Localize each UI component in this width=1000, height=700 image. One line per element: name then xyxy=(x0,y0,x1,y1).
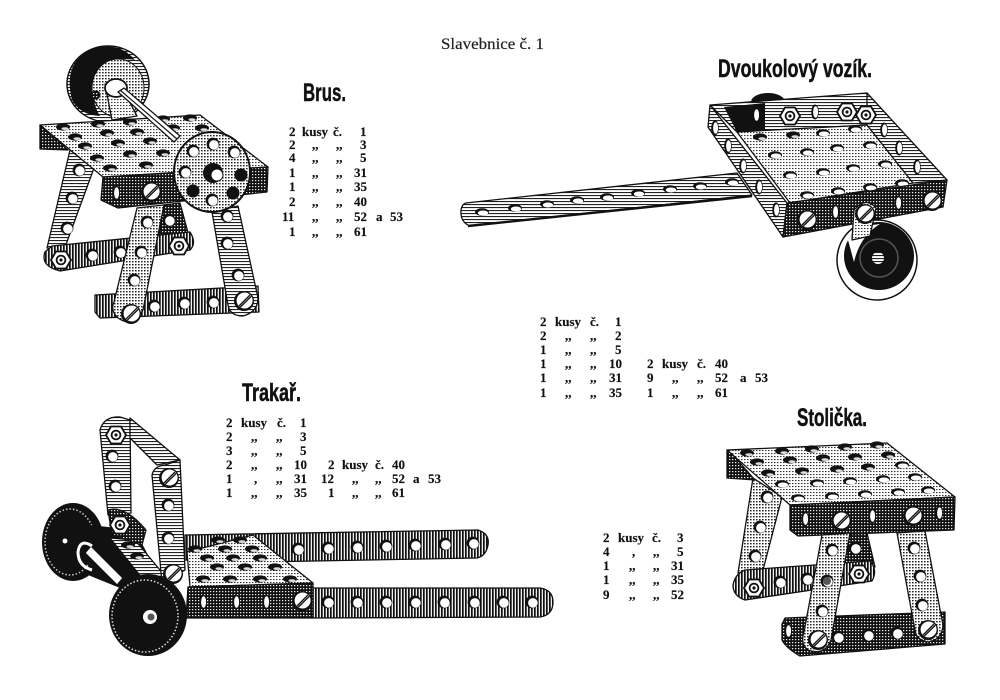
parts list: Trakař: ,, xyxy=(251,485,258,500)
axle bracket xyxy=(105,84,137,120)
bottom bar xyxy=(95,286,259,318)
parts list: Brus xyxy=(282,124,404,239)
parts list: Trakař: ,, xyxy=(276,429,282,444)
parts list: Trakař: , xyxy=(254,471,257,486)
parts list: Brus: ,, xyxy=(336,150,342,165)
parts list: Dvoukolový vozík: a xyxy=(740,370,747,385)
rear left leg xyxy=(738,478,782,573)
rear left leg xyxy=(47,150,94,250)
drawbar xyxy=(461,173,752,226)
parts list: Trakař: ,, xyxy=(352,485,358,500)
right upright xyxy=(152,460,185,583)
parts list: Stolička: ,, xyxy=(629,572,636,587)
back wall xyxy=(710,93,870,132)
front wheel xyxy=(109,574,187,656)
parts list: Brus: kusy xyxy=(302,124,329,139)
parts list: Trakař: č. xyxy=(375,457,384,472)
parts list: Dvoukolový vozík: č. xyxy=(697,356,706,371)
left wall xyxy=(708,105,787,237)
parts list: Trakař: 2 xyxy=(226,457,232,472)
parts list: Brus: 31 xyxy=(354,165,367,180)
parts list: Dvoukolový vozík xyxy=(540,314,768,400)
parts list: Dvoukolový vozík: 1 xyxy=(540,385,546,400)
parts list: Dvoukolový vozík: 10 xyxy=(609,356,622,371)
parts list: Stolička: ,, xyxy=(629,587,636,602)
parts list: Brus: 4 xyxy=(289,150,296,165)
parts list: Brus: 52 xyxy=(354,209,367,224)
parts list: Trakař: ,, xyxy=(251,443,258,458)
parts list: Stolička: 9 xyxy=(603,587,610,602)
parts list: Dvoukolový vozík: ,, xyxy=(590,385,596,400)
parts list: Trakař: ,, xyxy=(251,429,258,444)
heading: Dvoukolový vozík: Dvoukolový vozík. xyxy=(718,55,872,83)
page title: Slavebnice č. 1 xyxy=(441,36,544,53)
rear wheel edge xyxy=(751,93,785,111)
parts list: Brus: 1 xyxy=(289,165,296,180)
parts list: Dvoukolový vozík: ,, xyxy=(590,370,596,385)
dark shadow behind axle xyxy=(88,525,160,590)
parts list: Trakař: 2 xyxy=(328,457,334,472)
parts list: Stolička: ,, xyxy=(653,544,660,559)
parts list: Stolička: ,, xyxy=(653,558,660,573)
illustration: Dvoukolový vozík cart xyxy=(461,93,947,300)
parts list: Stolička: č. xyxy=(652,530,661,545)
parts list: Stolička: 35 xyxy=(671,572,684,587)
parts list: Brus: 2 xyxy=(289,124,296,139)
parts list: Dvoukolový vozík: 61 xyxy=(715,385,728,400)
parts list: Stolička: ,, xyxy=(653,572,660,587)
deck plate xyxy=(187,535,313,587)
parts list: Brus: 11 xyxy=(282,209,294,224)
parts list: Stolička: 1 xyxy=(603,572,610,587)
parts list: Stolička: , xyxy=(632,544,635,559)
parts list: Brus: ,, xyxy=(336,209,342,224)
front right leg xyxy=(897,531,943,642)
parts list: Trakař: 53 xyxy=(428,471,442,486)
parts list: Dvoukolový vozík: ,, xyxy=(565,342,572,357)
parts list: Dvoukolový vozík: 5 xyxy=(615,342,622,357)
parts list: Dvoukolový vozík: 52 xyxy=(715,370,728,385)
parts list: Brus: 61 xyxy=(354,224,367,239)
parts list: Brus: 3 xyxy=(360,137,367,152)
parts list: Trakař: ,, xyxy=(276,485,282,500)
parts list: Trakař: č. xyxy=(277,415,286,430)
illustration: Brus grinder xyxy=(40,46,268,324)
heading: Trakař: Trakař. xyxy=(242,379,301,407)
table top plate xyxy=(40,115,268,177)
parts list: Trakař: 3 xyxy=(226,443,233,458)
parts list: Dvoukolový vozík: ,, xyxy=(590,356,596,371)
parts list: Dvoukolový vozík: 2 xyxy=(647,356,654,371)
parts list: Stolička: 52 xyxy=(671,587,684,602)
parts list: Trakař: 2 xyxy=(226,415,232,430)
parts list: Trakař: 40 xyxy=(392,457,405,472)
parts list: Dvoukolový vozík: ,, xyxy=(565,385,572,400)
parts list: Dvoukolový vozík: ,, xyxy=(565,356,572,371)
axle xyxy=(118,88,180,142)
parts list: Brus: 40 xyxy=(354,194,367,209)
parts list: Trakař xyxy=(226,415,442,500)
parts list: Trakař: 1 xyxy=(300,415,306,430)
seat top plate xyxy=(727,443,955,505)
bottom bar xyxy=(782,612,945,656)
front wall xyxy=(783,180,947,237)
parts list: Brus: ,, xyxy=(312,194,318,209)
front seat side xyxy=(790,497,955,536)
left flange xyxy=(727,450,755,480)
top diagonal bar xyxy=(130,418,180,465)
parts list: Dvoukolový vozík: ,, xyxy=(565,328,572,343)
parts list: Trakař: kusy xyxy=(342,457,369,472)
parts list: Trakař: 1 xyxy=(226,485,232,500)
parts list: Brus: 2 xyxy=(289,137,296,152)
parts list: Brus: 1 xyxy=(289,224,296,239)
lower handle xyxy=(313,588,553,618)
parts list: Trakař: 2 xyxy=(226,429,232,444)
parts list: Dvoukolový vozík: 2 xyxy=(540,314,546,329)
parts list: Brus: ,, xyxy=(336,194,342,209)
parts list: Stolička: 3 xyxy=(677,530,684,545)
parts list: Brus: 5 xyxy=(360,150,367,165)
parts list: Brus: č. xyxy=(333,124,342,139)
parts list: Trakař: a xyxy=(413,471,420,486)
parts list: Dvoukolový vozík: ,, xyxy=(590,328,596,343)
parts list: Dvoukolový vozík: 35 xyxy=(609,385,622,400)
floor plate xyxy=(737,125,913,203)
parts list: Trakař: ,, xyxy=(251,457,258,472)
parts list: Brus: 53 xyxy=(390,209,404,224)
parts list: Brus: ,, xyxy=(312,209,318,224)
parts list: Dvoukolový vozík: ,, xyxy=(565,370,572,385)
parts list: Trakař: kusy xyxy=(241,415,268,430)
parts list: Brus: 1 xyxy=(289,179,296,194)
front left leg xyxy=(113,205,164,322)
parts list: Dvoukolový vozík: ,, xyxy=(697,370,704,385)
rear horizontal bar xyxy=(733,561,875,600)
parts list: Dvoukolový vozík: 1 xyxy=(540,356,546,371)
parts list: Dvoukolový vozík: 40 xyxy=(715,356,728,371)
parts list: Dvoukolový vozík: 1 xyxy=(540,342,546,357)
parts list: Dvoukolový vozík: 9 xyxy=(647,370,654,385)
parts list: Stolička: ,, xyxy=(653,587,660,602)
parts list: Stolička: 2 xyxy=(603,530,610,545)
axle bracket and screw xyxy=(852,202,876,240)
parts list: Trakař: ,, xyxy=(352,471,358,486)
parts list: Trakař: ,, xyxy=(375,471,382,486)
parts list: Trakař: 35 xyxy=(294,485,308,500)
parts list: Stolička: 1 xyxy=(603,558,610,573)
rear wheel xyxy=(42,503,104,581)
parts list: Brus: 35 xyxy=(354,179,368,194)
rear dark centre leg xyxy=(843,533,875,567)
parts list: Trakař: ,, xyxy=(276,471,282,486)
upper handle xyxy=(185,530,488,562)
parts list: Stolička: kusy xyxy=(618,530,645,545)
illustration: Stolička stool xyxy=(727,441,955,656)
parts list: Brus: ,, xyxy=(312,179,318,194)
left flange xyxy=(40,125,68,150)
parts list: Dvoukolový vozík: č. xyxy=(590,314,599,329)
parts list: Trakař: 61 xyxy=(392,485,405,500)
pulley disc xyxy=(174,132,250,212)
parts list: Brus: ,, xyxy=(312,224,318,239)
parts list: Dvoukolový vozík: 31 xyxy=(609,370,622,385)
parts list: Brus: ,, xyxy=(336,165,342,180)
parts list: Stolička: 5 xyxy=(677,544,684,559)
front wheel xyxy=(837,220,917,300)
parts list: Trakař: ,, xyxy=(276,443,282,458)
parts list: Dvoukolový vozík: 1 xyxy=(647,385,654,400)
side bracket xyxy=(110,538,165,578)
rear dark centre leg xyxy=(158,203,190,245)
heading: Stolička: Stolička. xyxy=(797,404,867,432)
parts list: Trakař: 5 xyxy=(300,443,307,458)
parts list: Dvoukolový vozík: ,, xyxy=(590,342,596,357)
parts list: Stolička: 4 xyxy=(603,544,610,559)
front right leg xyxy=(212,206,258,316)
parts list: Brus: ,, xyxy=(312,137,318,152)
parts list: Trakař: 31 xyxy=(294,471,307,486)
parts list: Dvoukolový vozík: kusy xyxy=(662,356,689,371)
parts list: Brus: 2 xyxy=(289,194,296,209)
parts list: Dvoukolový vozík: kusy xyxy=(555,314,582,329)
parts list: Brus: ,, xyxy=(312,150,318,165)
parts list: Trakař: ,, xyxy=(375,485,382,500)
parts list: Brus: ,, xyxy=(336,137,342,152)
left upright xyxy=(100,417,131,515)
parts list: Dvoukolový vozík: 2 xyxy=(615,328,622,343)
deck front side xyxy=(186,583,313,618)
parts list: Trakař: ,, xyxy=(276,457,282,472)
parts list: Trakař: 12 xyxy=(321,471,334,486)
front side plate xyxy=(101,167,268,208)
parts list: Trakař: 10 xyxy=(294,457,307,472)
parts list: Trakař: 52 xyxy=(392,471,405,486)
parts list: Brus: 1 xyxy=(360,124,366,139)
rear horizontal bar xyxy=(44,232,194,271)
parts list: Dvoukolový vozík: 2 xyxy=(540,328,546,343)
front left leg xyxy=(803,533,850,652)
parts list: Brus: a xyxy=(376,209,383,224)
parts list: Trakař: 1 xyxy=(226,471,232,486)
parts list: Stolička: 31 xyxy=(671,558,684,573)
parts list: Stolička: ,, xyxy=(629,558,636,573)
parts list: Dvoukolový vozík: 1 xyxy=(615,314,622,329)
axle xyxy=(85,546,123,585)
parts list: Dvoukolový vozík: ,, xyxy=(697,385,704,400)
parts list: Dvoukolový vozík: 53 xyxy=(755,370,768,385)
parts list: Dvoukolový vozík: ,, xyxy=(672,370,678,385)
parts list: Brus: ,, xyxy=(336,224,342,239)
parts list: Dvoukolový vozík: ,, xyxy=(672,385,678,400)
parts list: Stolička xyxy=(603,530,684,602)
parts list: Dvoukolový vozík: 1 xyxy=(540,370,546,385)
heading: Brus: Brus. xyxy=(303,79,346,107)
right wall xyxy=(867,93,947,183)
back grinding wheel xyxy=(67,46,149,122)
parts list: Brus: ,, xyxy=(312,165,318,180)
parts list: Trakař: 1 xyxy=(328,485,334,500)
parts list: Brus: ,, xyxy=(336,179,342,194)
parts list: Trakař: 3 xyxy=(300,429,307,444)
illustration: Trakař wheelbarrow xyxy=(42,417,553,656)
